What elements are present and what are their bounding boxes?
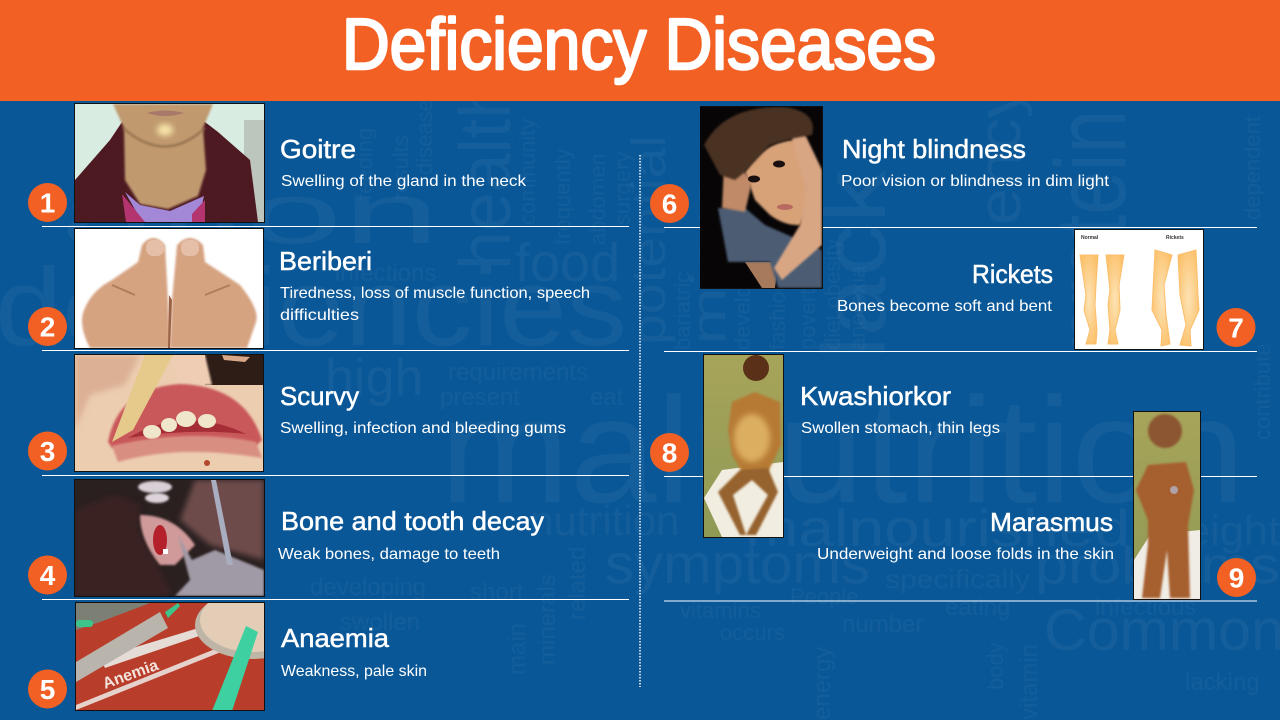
left column dividers [42,226,629,600]
background word cloud: community [515,119,540,225]
item 7: Rickets [837,230,1256,350]
background word cloud: malnutrition [440,366,1245,534]
background word cloud: weight [1154,507,1280,554]
background word cloud: lack [805,169,905,360]
background word cloud: main [504,623,531,675]
number 6 [650,184,689,223]
number 3 [28,432,67,470]
background word cloud: body [983,642,1008,690]
photo: scurvy [74,354,264,472]
item 3: Scurvy [28,354,566,472]
item 2: Beriberi [28,228,590,349]
number 9 [1217,558,1256,597]
heading: Bone and tooth decay: Bone and tooth decay [281,506,544,536]
description: Bone and tooth decay: Weak bones, damage to teeth [278,546,500,563]
number 1: 1 [40,188,55,218]
background word cloud: symptoms [605,532,870,595]
item 9: Marasmus [817,411,1256,600]
background word cloud: ency [966,85,1033,225]
heading: Beriberi: Beriberi [279,246,372,276]
photo: marasmus [1133,411,1201,600]
photo: goitre [74,103,265,223]
number 8: 8 [662,438,677,468]
background word cloud: feeding [352,128,377,200]
item 8: Kwashiorkor [650,354,1000,538]
background word cloud: swollen [340,609,420,636]
background word cloud: results [388,135,413,200]
number 2: 2 [40,312,55,342]
background word cloud: related [564,547,591,620]
dotted centre divider [639,155,641,687]
number 2 [28,307,67,346]
right column dividers [664,228,1257,601]
background word cloud: requirements [448,359,588,386]
background word cloud: diet [759,104,817,195]
description: Rickets: Bones become soft and bent [837,298,1053,315]
description: Anaemia: Weakness, pale skin [281,663,427,680]
item 1: Goitre [28,103,527,223]
background word cloud: high [325,349,423,407]
photo: dental treatment [74,479,265,597]
description: Goitre: Swelling of the gland in the neck [281,173,527,190]
background word cloud: specifically [885,564,1030,594]
item 5: Anaemia [28,602,426,711]
background word cloud: vitamin [1016,644,1043,720]
illustration: normal and rickets legs [1074,230,1204,350]
item 6: Night blindness [650,106,1110,289]
background word cloud: potential [623,135,676,345]
background word cloud: infectious [1095,594,1196,621]
description: Beriberi [280,285,590,324]
heading: Rickets: Rickets [972,259,1053,289]
number 5 [28,670,67,708]
background word cloud: micro [683,175,736,345]
background word cloud: present [440,384,520,411]
heading: Marasmus: Marasmus [990,507,1113,537]
number 5: 5 [40,674,55,705]
heading: Kwashiorkor: Kwashiorkor [800,381,951,411]
background word cloud: developing [310,574,426,601]
illustration: normal and rickets legs: Rickets [1166,235,1184,241]
title: Deficiency Diseases [342,5,936,85]
background word cloud: eating [945,594,1010,621]
heading: Night blindness: Night blindness [842,134,1026,164]
background word cloud: malnourished [745,500,1130,558]
background word cloud: occurs [720,620,785,645]
photo: kwashiorkor [703,354,784,538]
background word cloud: food [515,233,620,293]
description: Marasmus: Underweight and loose folds in the skin [817,546,1114,563]
heading: Scurvy: Scurvy [280,381,359,411]
illustration: normal and rickets legs: Normal [1081,235,1099,241]
background word cloud: develop [730,273,755,350]
background word cloud: vitamins [680,598,761,623]
description: Night blindness: Poor vision or blindness in dim light [841,173,1110,190]
description: Kwashiorkor: Swollen stomach, thin legs [801,420,1000,437]
background word cloud: diet obesity [820,239,845,350]
background word cloud: Common [1044,598,1280,663]
background word cloud: health [446,80,526,270]
photo: beriberi [74,228,264,349]
background word cloud: ation [60,166,440,262]
background word cloud: nutrition [530,497,679,544]
background word cloud: minerals [534,574,561,665]
background word cloud: protein [1035,110,1147,350]
header banner [0,0,1280,101]
item 4: Bone and tooth decay [28,479,544,597]
description: Scurvy: Swelling, infection and bleeding gums [280,420,566,437]
background word cloud: People [790,584,859,609]
background word cloud: frequently [550,148,575,245]
photo: anaemia [75,602,265,711]
number 4 [28,556,67,594]
background word cloud: surgery [610,152,635,225]
number 8 [650,433,689,472]
background word cloud: infections [335,260,436,287]
number 4: 4 [40,560,56,591]
number 1 [28,183,67,222]
background word cloud: bariatric [670,272,695,350]
heading: Goitre: Goitre [280,134,356,164]
number 7: 7 [1228,312,1244,344]
number 6: 6 [662,188,677,220]
description: Beriberi: difficulties [280,307,359,324]
description: Beriberi: Tiredness, loss of muscle function, speech [280,285,590,302]
background word cloud: deficiencies [0,246,627,369]
number 9: 9 [1229,562,1244,594]
background word cloud: fashion [765,279,790,350]
background word cloud: poverty [795,278,820,350]
background word cloud: anorexia [845,265,870,350]
background word cloud: abdomen [585,153,610,245]
background word cloud: disease [412,99,437,175]
background word cloud: energy [809,647,836,720]
background word cloud: number [842,611,923,638]
background word cloud: contribute [1250,343,1275,440]
background word cloud: problems [1035,537,1280,595]
photo: night blindness [700,106,823,289]
background word cloud: short [470,579,524,606]
photo: anaemia: Anemia [101,657,161,693]
background word cloud: lacking [1185,669,1260,696]
background word cloud: eat [590,384,624,411]
number 3: 3 [40,436,55,467]
heading: Anaemia: Anaemia [281,623,390,653]
background word cloud: dependent [1240,116,1265,220]
number 7 [1216,308,1256,347]
